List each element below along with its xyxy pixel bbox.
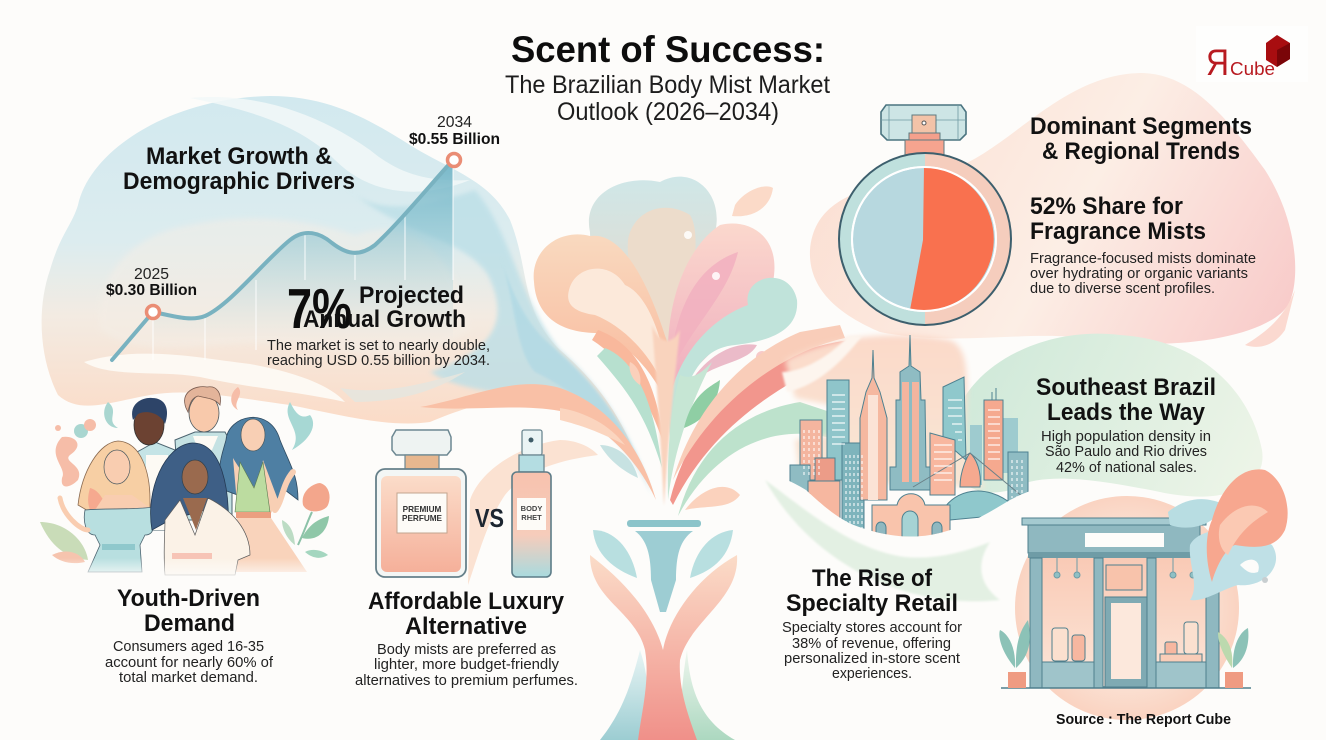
light band bbox=[190, 97, 470, 192]
logo cube bbox=[1266, 35, 1290, 67]
heading: market growth: Demographic Drivers bbox=[123, 168, 355, 195]
pendants bbox=[1054, 558, 1196, 578]
illustration: city skyline bbox=[790, 335, 1028, 540]
display bottles bbox=[1052, 622, 1202, 662]
label: body mist: RHET bbox=[521, 513, 542, 522]
heading: southeast brazil: Leads the Way bbox=[1047, 399, 1206, 426]
person: blonde woman bbox=[60, 441, 154, 572]
person: man with dark hair bbox=[132, 398, 183, 530]
illustration: bottle pie chart bbox=[839, 105, 1011, 325]
stat: 7 percent growth bbox=[267, 277, 490, 369]
top teal lobe bbox=[589, 177, 719, 345]
title: Scent of Success: bbox=[511, 29, 825, 70]
heading: southeast brazil bbox=[1036, 374, 1216, 426]
label 2025: $0.30 Billion bbox=[106, 282, 197, 299]
heading: dominant segments: Dominant Segments bbox=[1030, 113, 1252, 140]
background towers bbox=[970, 425, 982, 485]
person: woman in green top bbox=[220, 417, 307, 572]
station bbox=[872, 494, 950, 540]
soft decorations bbox=[40, 387, 330, 563]
stat: fragrance mists: over hydrating or organic variants bbox=[1030, 265, 1248, 282]
heading: specialty retail bbox=[786, 565, 958, 617]
smoke bbox=[1168, 469, 1288, 600]
text: southeast brazil bbox=[1041, 428, 1211, 476]
sail dome bbox=[960, 453, 980, 487]
label 2034 bbox=[409, 114, 500, 148]
right pink lobe bbox=[668, 223, 774, 405]
stat: fragrance mists: 52% Share for bbox=[1030, 193, 1183, 220]
stat: 7 percent growth: reaching USD 0.55 billion by 2034. bbox=[267, 352, 490, 369]
text: affordable luxury bbox=[355, 641, 578, 689]
heading: specialty retail: Specialty Retail bbox=[786, 590, 958, 617]
label 2034: $0.55 Billion bbox=[409, 131, 500, 148]
text: southeast brazil: 42% of national sales. bbox=[1056, 459, 1197, 476]
title bbox=[505, 29, 830, 126]
perfume bottle bbox=[376, 430, 466, 577]
lower green wave bbox=[760, 475, 1080, 601]
illustration: storefront bbox=[999, 469, 1288, 720]
text: specialty retail bbox=[782, 619, 962, 682]
marker 2025 bbox=[146, 306, 160, 318]
text: youth demand: account for nearly 60% of bbox=[105, 654, 274, 671]
versus label: VS bbox=[475, 503, 504, 533]
text: affordable luxury: alternatives to premium perfumes. bbox=[355, 672, 578, 689]
plant left bbox=[999, 620, 1030, 688]
stat: 7 percent growth: 7% bbox=[287, 277, 352, 341]
tower I bbox=[930, 433, 955, 495]
door bbox=[1105, 597, 1147, 687]
blue dome bbox=[943, 491, 1013, 520]
stream left bbox=[592, 330, 664, 445]
right streams bbox=[670, 325, 850, 516]
logo bbox=[1196, 26, 1308, 83]
heading: market growth bbox=[123, 143, 355, 195]
ground line bbox=[1001, 687, 1251, 689]
title: Outlook (2026–2034) bbox=[557, 98, 779, 126]
heading: affordable luxury: Alternative bbox=[405, 613, 527, 640]
windows bbox=[804, 395, 1022, 530]
text: southeast brazil: São Paulo and Rio drives bbox=[1045, 443, 1207, 460]
cloud leaf bbox=[684, 380, 720, 428]
tower B bbox=[800, 420, 822, 480]
logo letter: Я bbox=[1206, 42, 1229, 83]
tower E bbox=[842, 443, 864, 535]
title: The Brazilian Body Mist Market bbox=[505, 71, 830, 99]
scent cloud bbox=[534, 177, 797, 506]
text: specialty retail: experiences. bbox=[832, 665, 912, 682]
tower H bbox=[943, 377, 966, 460]
text: affordable luxury: lighter, more budget-friendly bbox=[374, 656, 559, 673]
heading: dominant segments bbox=[1030, 113, 1252, 165]
left peach lobe bbox=[534, 234, 668, 405]
person: man with blond hair bbox=[175, 387, 232, 520]
heading: dominant segments: & Regional Trends bbox=[1042, 138, 1240, 165]
cream inner cloud bbox=[100, 218, 470, 354]
city skyline sky bbox=[782, 335, 985, 488]
funnel and base bbox=[590, 520, 737, 740]
text: youth demand: total market demand. bbox=[119, 669, 258, 686]
stat: fragrance mists bbox=[1030, 193, 1256, 297]
flower bbox=[303, 483, 330, 511]
tower J bbox=[984, 400, 1003, 480]
illustration: perfume vs body mist bbox=[376, 430, 551, 577]
label: body mist bbox=[517, 498, 546, 530]
stream centre bbox=[652, 325, 680, 506]
green blob bbox=[949, 334, 1263, 497]
heading: affordable luxury bbox=[368, 588, 565, 640]
tower L bbox=[1008, 452, 1028, 502]
stat: 7 percent growth: Projected bbox=[359, 282, 464, 309]
left flowing background bbox=[42, 96, 656, 500]
label 2034: 2034 bbox=[437, 114, 472, 131]
stat: 7 percent growth: The market is set to nearly double, bbox=[267, 337, 490, 354]
peach swoosh behind bottles bbox=[468, 408, 638, 585]
label: premium perfume bbox=[397, 493, 447, 533]
stat: fragrance mists: Fragrance Mists bbox=[1030, 218, 1206, 245]
sign bbox=[1085, 533, 1164, 547]
text: affordable luxury: Body mists are preferred as bbox=[377, 641, 556, 658]
bottle cap bbox=[881, 105, 966, 140]
nozzle bbox=[912, 115, 936, 135]
text: specialty retail: Specialty stores account for bbox=[782, 619, 962, 636]
plant right bbox=[1218, 628, 1248, 688]
stat: fragrance mists: Fragrance-focused mists dominate bbox=[1030, 250, 1256, 267]
line chart bbox=[112, 154, 460, 360]
marker 2034 bbox=[448, 154, 460, 166]
window base bbox=[1042, 662, 1094, 688]
facade bbox=[1033, 553, 1215, 687]
heading: southeast brazil: Southeast Brazil bbox=[1036, 374, 1216, 401]
right green lobe bbox=[668, 278, 797, 445]
columns bbox=[1030, 558, 1219, 688]
heading: specialty retail: The Rise of bbox=[812, 565, 933, 592]
backdrop circle bbox=[1015, 496, 1239, 720]
label: body mist: BODY bbox=[521, 504, 542, 513]
illustration: young consumers bbox=[40, 387, 330, 580]
heading: youth-driven demand: Demand bbox=[144, 610, 235, 637]
heading: youth-driven demand bbox=[117, 585, 260, 637]
label 2025: 2025 bbox=[134, 266, 169, 283]
mist bottle bbox=[512, 430, 551, 577]
stat: fragrance mists: due to diverse scent profiles. bbox=[1030, 280, 1215, 297]
heading: affordable luxury: Affordable Luxury bbox=[368, 588, 565, 615]
tower F bbox=[860, 350, 887, 500]
stat: 7 percent growth: Annual Growth bbox=[303, 306, 466, 333]
tower A bbox=[827, 380, 849, 480]
pie chart bbox=[852, 167, 996, 311]
heading: market growth: Market Growth & bbox=[146, 143, 332, 170]
white wave bbox=[84, 354, 345, 402]
right peach blob bbox=[810, 73, 1295, 347]
coral ribbon bbox=[420, 384, 656, 500]
logo: Cube bbox=[1230, 59, 1275, 79]
text: southeast brazil: High population density in bbox=[1041, 428, 1211, 445]
label: premium perfume: PERFUME bbox=[402, 514, 443, 523]
label: premium perfume: PREMIUM bbox=[403, 505, 442, 514]
text: specialty retail: 38% of revenue, offering bbox=[792, 635, 951, 652]
tower G bbox=[890, 335, 930, 490]
source note: Source : The Report Cube bbox=[1056, 712, 1231, 728]
blue wave bbox=[345, 185, 652, 495]
person: woman in white dress bbox=[151, 443, 250, 575]
bottle body bbox=[839, 153, 1011, 325]
heading: youth-driven demand: Youth-Driven bbox=[117, 585, 260, 612]
neck bbox=[905, 133, 944, 155]
text: youth demand bbox=[105, 638, 274, 686]
text: youth demand: Consumers aged 16-35 bbox=[113, 638, 264, 655]
text: specialty retail: personalized in-store scent bbox=[784, 650, 961, 667]
label 2025 bbox=[106, 266, 197, 299]
